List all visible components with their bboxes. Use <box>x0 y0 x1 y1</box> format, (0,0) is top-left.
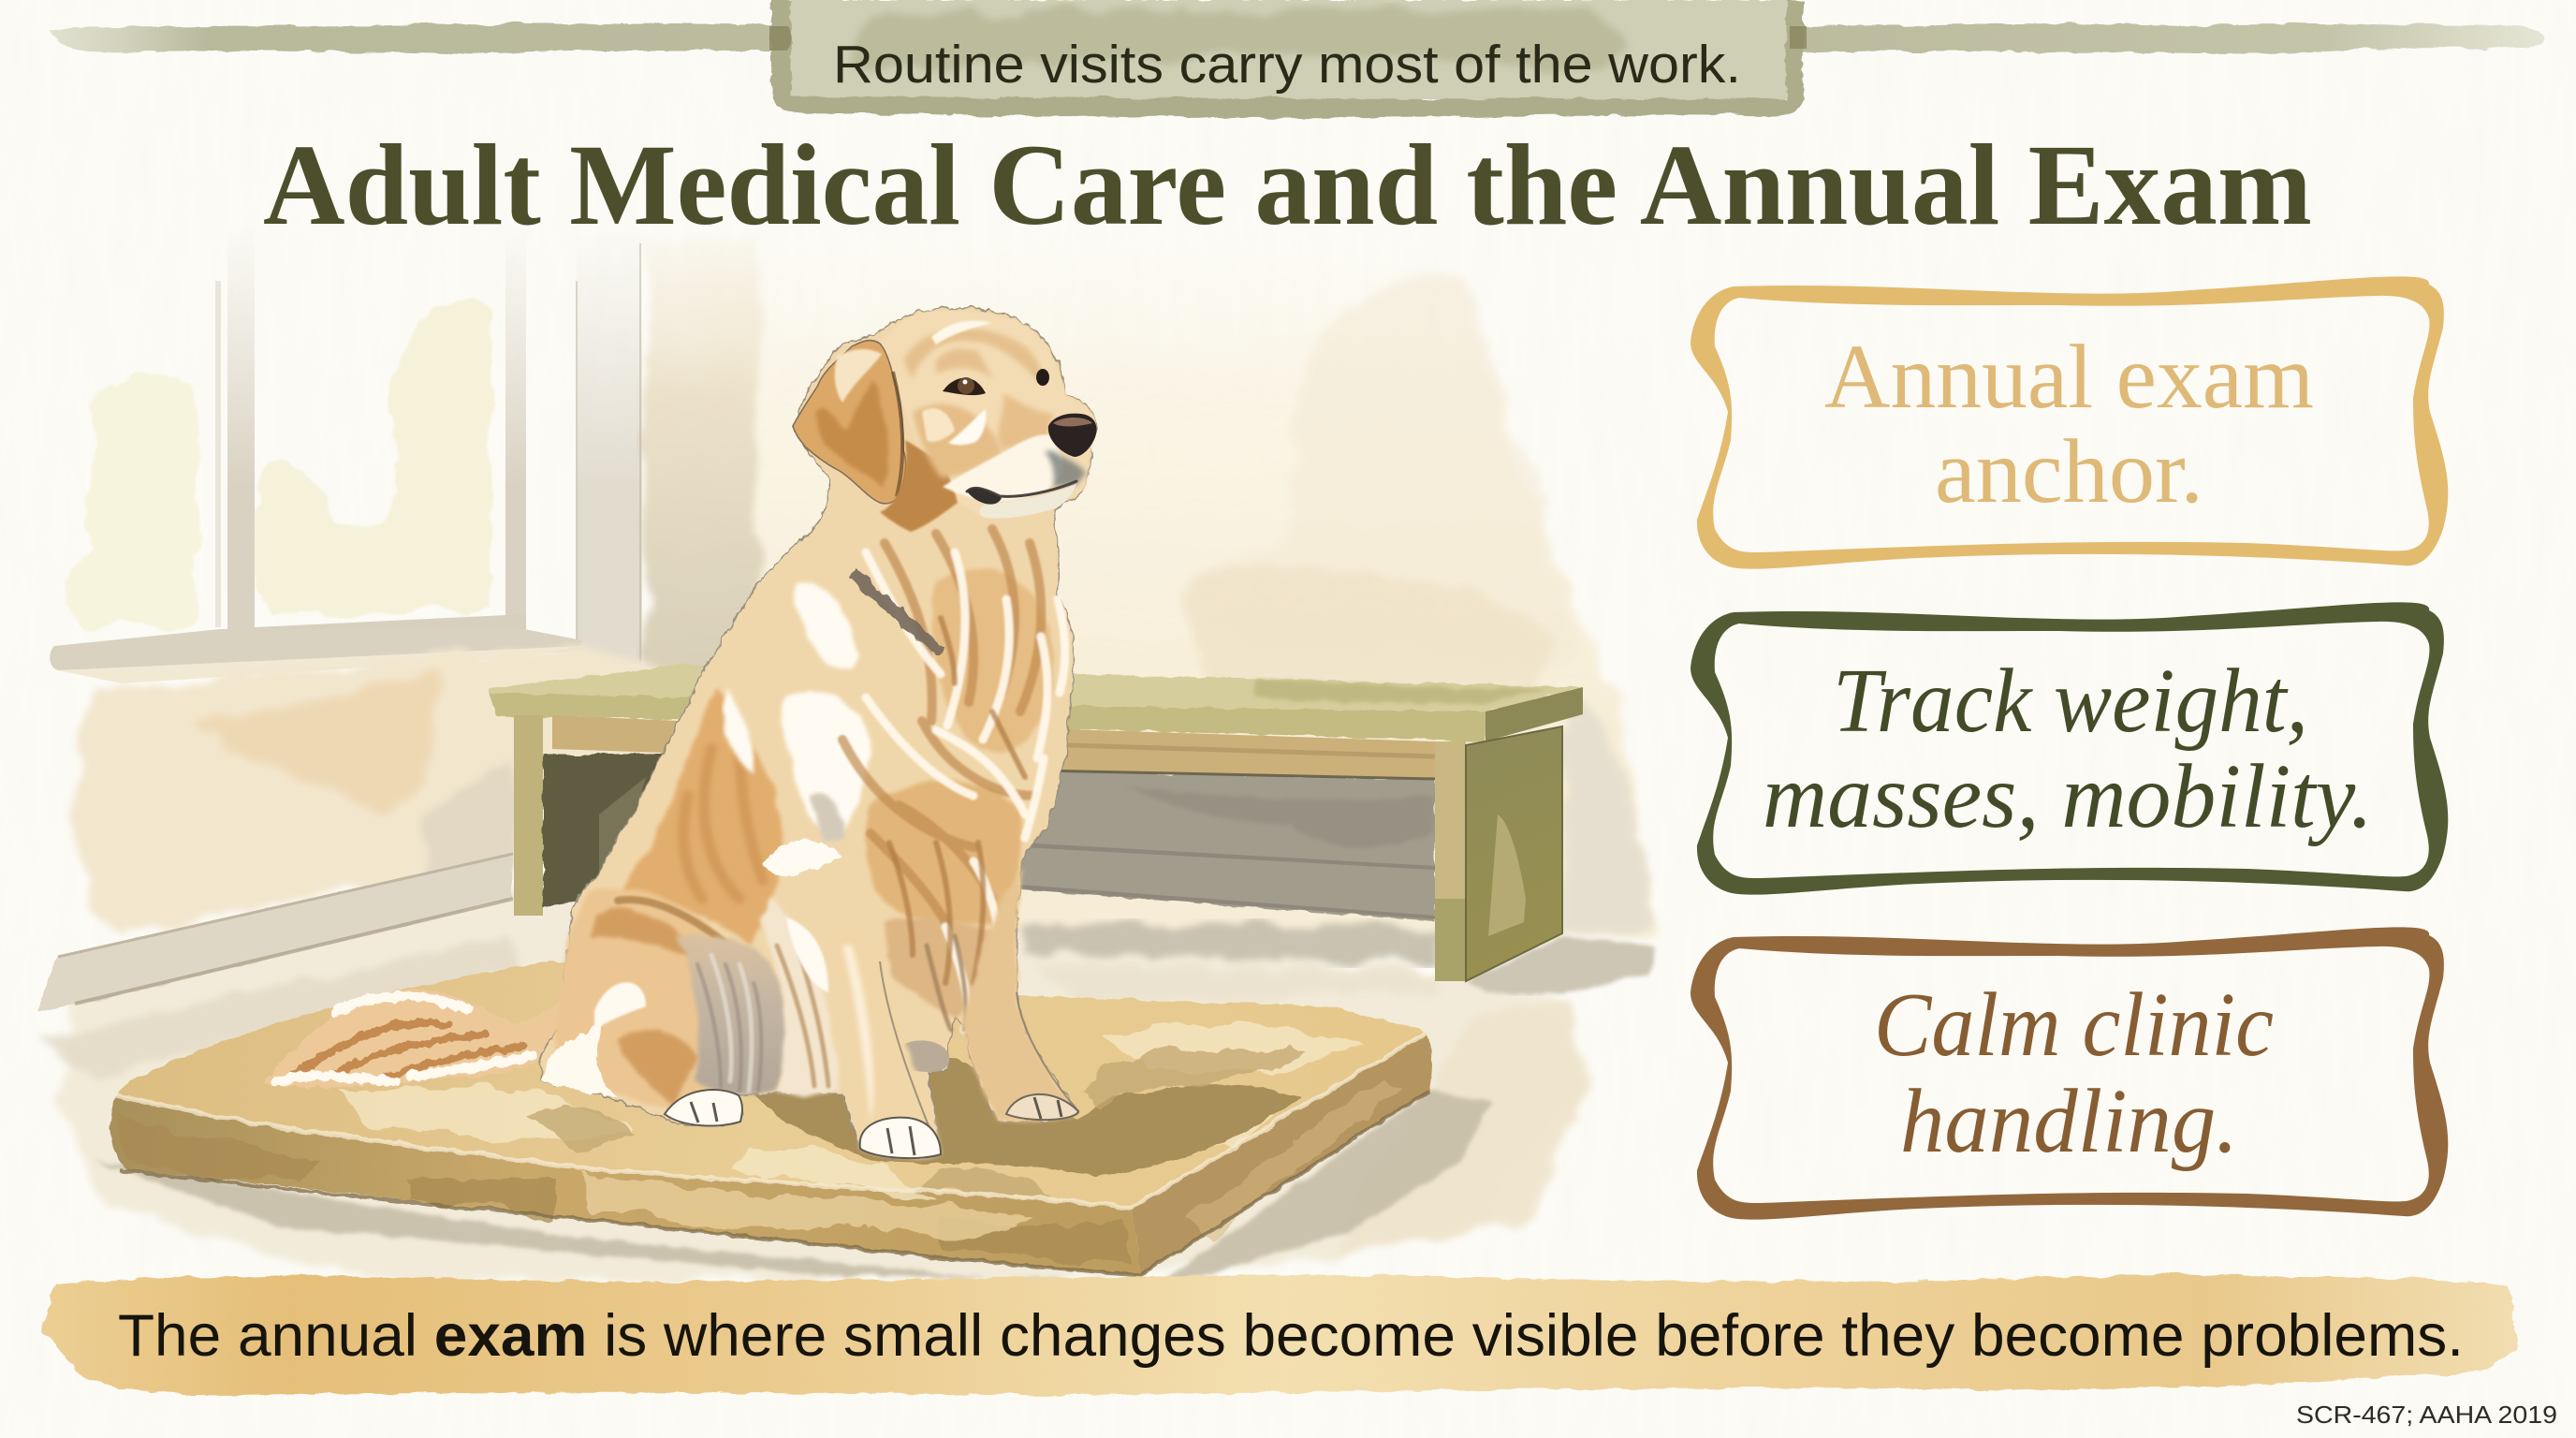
mat right side <box>1132 1032 1432 1275</box>
mat shadow <box>94 1091 1493 1284</box>
banner frame <box>771 0 1803 118</box>
ribbon overlaps <box>769 26 1807 51</box>
bottom takeaway band <box>41 1274 2518 1395</box>
mat front drips <box>112 1114 1133 1264</box>
rear white tuft <box>541 1020 618 1097</box>
dog ear <box>793 341 906 504</box>
right leg front <box>1435 741 1466 981</box>
mat front side <box>110 1095 1141 1275</box>
eye <box>943 377 986 395</box>
lower jaw <box>980 484 1076 519</box>
toe lines <box>691 1097 1061 1155</box>
window panes <box>65 300 491 627</box>
mouth <box>967 481 1076 496</box>
floor <box>56 889 1657 1283</box>
left leg <box>514 715 543 916</box>
dog silhouette <box>540 307 1096 1158</box>
mat pale highlights <box>337 1024 1367 1198</box>
top rule: right ribbon <box>1802 24 2545 53</box>
callout: track weight, masses, mobility <box>1690 602 2448 895</box>
orange flank <box>622 688 782 946</box>
near foreleg <box>833 929 941 1158</box>
dog paws <box>665 1090 941 1158</box>
wall corner and curtain <box>577 234 758 683</box>
far eye <box>1036 369 1049 386</box>
pale hanging chest fur <box>760 899 840 1095</box>
callout: annual exam anchor <box>1690 276 2448 569</box>
takeaway text: The annual exam is where small changes become visible before they become problems. <box>118 1303 2464 1369</box>
bench top side edge <box>1486 687 1583 741</box>
room wall wash <box>711 234 1657 946</box>
mat creased shadow under dog <box>749 1058 1301 1175</box>
window frame and sill <box>50 215 582 683</box>
bench top surface <box>490 665 1583 712</box>
calm clinic text: Calm clinic <box>1874 975 2274 1076</box>
ruff tan wash <box>866 781 1021 924</box>
dog mat <box>110 961 1431 1275</box>
haunch <box>552 888 734 1109</box>
collar <box>852 571 942 653</box>
banner: routine visits <box>769 0 1807 118</box>
forehead shading <box>903 329 1042 384</box>
head base <box>880 311 1095 518</box>
white shoulder and chest patches <box>795 583 859 670</box>
annual exam text: anchor. <box>1935 421 2203 522</box>
nose <box>1048 414 1096 457</box>
dog body <box>540 307 1096 1158</box>
dog tail <box>263 989 571 1087</box>
grey muzzle shading <box>1045 450 1086 487</box>
right leg side <box>1466 726 1562 981</box>
wall below window <box>77 646 693 936</box>
baseboard <box>37 854 524 1077</box>
track weight text: Track weight, <box>1833 651 2308 752</box>
brown haunch fold <box>618 900 739 955</box>
source note: SCR-467; AAHA 2019 <box>2296 1401 2557 1429</box>
mat top <box>116 961 1427 1208</box>
track weight text: masses, mobility. <box>1763 746 2373 847</box>
annual exam text: Annual exam <box>1824 327 2314 428</box>
far rear paw <box>902 1040 949 1072</box>
muzzle <box>943 434 1063 501</box>
mat piping <box>116 1032 1427 1208</box>
banner text: Routine visits carry most of the work. <box>833 35 1741 95</box>
bench apron <box>552 715 1435 779</box>
bench top front edge <box>490 693 1486 741</box>
title: Adult Medical Care and the Annual Exam <box>263 121 2312 249</box>
fur locks <box>842 529 1065 1030</box>
grey belly fur <box>676 934 788 1094</box>
illustration: golden retriever sitting on a mat in a sunlit room <box>37 215 1657 1284</box>
calm clinic text: handling. <box>1900 1071 2238 1172</box>
cheek <box>913 404 1002 477</box>
bench <box>490 665 1583 981</box>
top rule: left ribbon <box>49 23 779 54</box>
far foreleg <box>963 868 1078 1122</box>
bench back panel <box>1020 770 1435 921</box>
callout: calm clinic handling <box>1690 927 2448 1220</box>
chest fall between forelegs <box>885 918 1006 1020</box>
neck brown patch <box>880 440 958 532</box>
